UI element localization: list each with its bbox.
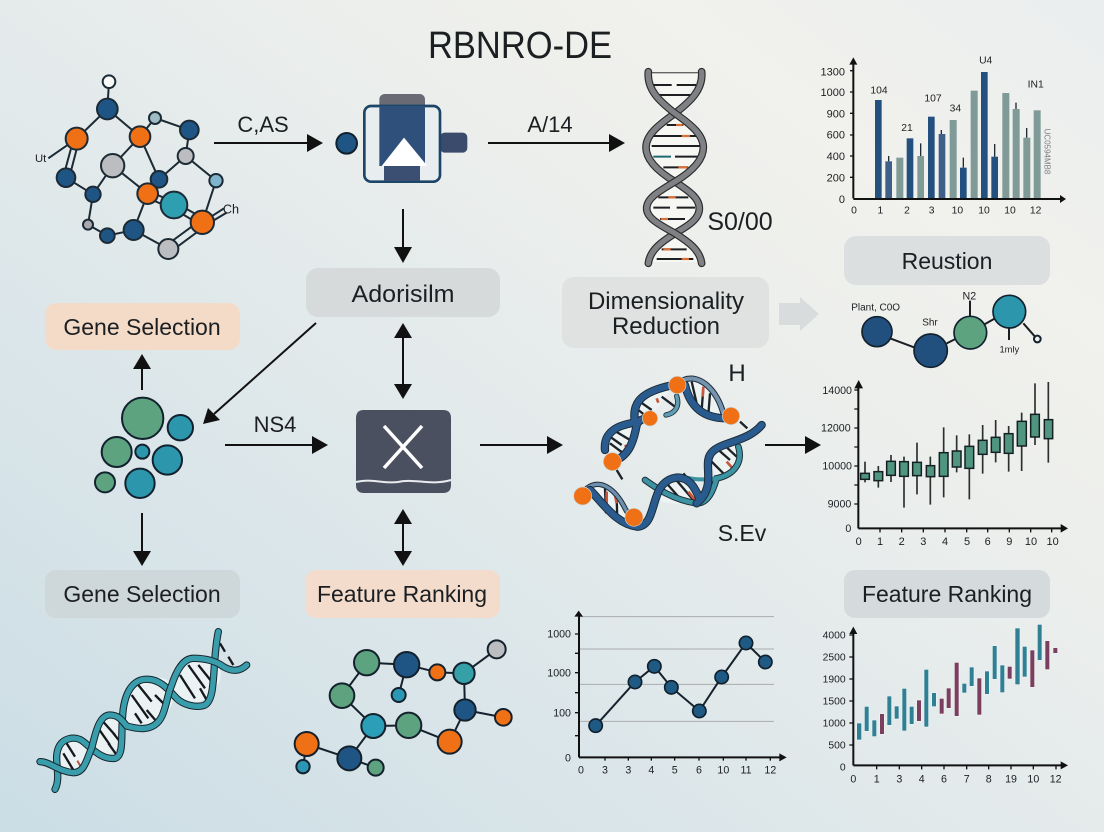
candlestick chart right: 6 (985, 536, 991, 548)
pill: Dimensionality Reduction: Dimensionality (588, 288, 744, 315)
pill: Dimensionality Reduction: Reduction (612, 313, 720, 340)
line chart (547, 611, 787, 777)
line chart: 0 (578, 765, 584, 777)
candlestick chart right: 14000 (822, 385, 852, 397)
icon: diagonal teal DNA (40, 632, 247, 789)
arrow: double X tile to Feature Ranking (394, 509, 412, 566)
pill: Gene Selection peach (45, 303, 240, 350)
candlestick chart right (821, 380, 1068, 548)
candlestick chart right: 10 (1025, 536, 1037, 548)
floating bar chart bottom right: 500 (828, 741, 846, 752)
arrow: Adorisilm to cluster (203, 323, 316, 424)
bar chart top right: 34 (950, 103, 961, 114)
bar chart top right (821, 55, 1066, 217)
line chart: 3 (625, 765, 631, 777)
icon: module block (336, 94, 467, 182)
bar chart top right: 3 (929, 206, 935, 217)
bar chart top right: 0 (851, 206, 857, 217)
pill: Reustion: Reustion (902, 248, 992, 274)
line chart: 1000 (547, 629, 571, 641)
floating bar chart bottom right: 6 (941, 774, 947, 786)
line chart: 3 (602, 765, 608, 777)
bar chart top right: 104 (870, 85, 888, 96)
line chart: 0 (565, 752, 571, 764)
bar chart top right: 0 (839, 194, 845, 206)
arrow: cluster down to Gene Selection (133, 513, 151, 566)
arrow: DNA loop to candlestick chart (765, 436, 821, 454)
arrow: molecule to module (214, 112, 323, 152)
line chart: 4 (648, 765, 654, 777)
arrow: cluster to Gene Selection (133, 354, 151, 390)
floating bar chart bottom right: 4000 (823, 631, 846, 642)
candlestick chart right: 0 (845, 523, 851, 535)
label: S0/00: S0/00 (707, 208, 773, 236)
icon: X tile (356, 410, 451, 493)
arrow: module to Adorisilm (394, 209, 412, 263)
candlestick chart right: 2 (899, 536, 905, 548)
pill: Gene Selection peach: Gene Selection (63, 314, 221, 340)
floating bar chart bottom right (823, 624, 1068, 786)
candlestick chart right: 5 (964, 536, 970, 548)
arrow: light block arrow (779, 297, 819, 331)
floating bar chart bottom right: 19 (1005, 774, 1017, 786)
line chart: 5 (672, 765, 678, 777)
bar chart top right: 200 (827, 172, 845, 184)
bar chart top right: 1000 (821, 87, 845, 99)
floating bar chart bottom right: 3 (896, 774, 902, 786)
bar chart top right: 2 (904, 206, 910, 217)
candlestick chart right: 3 (920, 536, 926, 548)
floating bar chart bottom right: 4 (919, 774, 925, 786)
bar chart top right: U4 (979, 55, 993, 66)
arrow label: A/14 (527, 112, 573, 137)
floating bar chart bottom right: 1500 (823, 697, 846, 708)
candlestick chart right: 4 (942, 536, 948, 548)
pill: Gene Selection grey (45, 570, 240, 618)
bar chart top right: 10 (978, 206, 990, 217)
arrow: module to DNA (488, 112, 625, 152)
label: Ut: Ut (35, 153, 47, 165)
bar chart top right: 10 (952, 206, 963, 217)
candlestick chart right: 9 (1006, 536, 1012, 548)
icon: small molecule right: 1mly (999, 345, 1020, 355)
bar chart top right: UC0594MB8 (1043, 129, 1052, 175)
icon: small molecule right (851, 290, 1041, 367)
label: S.Ev: S.Ev (718, 520, 767, 546)
floating bar chart bottom right: 1900 (823, 675, 846, 686)
candlestick chart right: 10 (1047, 536, 1059, 548)
floating bar chart bottom right: 1000 (823, 719, 846, 730)
line chart: 6 (696, 765, 702, 777)
candlestick chart right: 12000 (821, 422, 851, 434)
icon: small molecule right: N2 (963, 290, 976, 302)
arrow label: NS4 (254, 412, 296, 437)
bar chart top right: 12 (1030, 206, 1042, 217)
pill: Adorisilm (306, 268, 500, 317)
bar chart top right: 107 (924, 94, 942, 105)
bar chart top right: 900 (827, 108, 845, 120)
floating bar chart bottom right: 12 (1050, 774, 1062, 786)
arrow: X tile to DNA loop (480, 436, 563, 454)
floating bar chart bottom right: 0 (850, 774, 856, 786)
icon: molecule network top left (35, 75, 239, 259)
pill: Feature Ranking grey (844, 570, 1050, 618)
pill: Dimensionality Reduction (562, 277, 769, 348)
candlestick chart right: 1 (877, 536, 883, 548)
arrow: cluster to X tile (225, 412, 328, 454)
floating bar chart bottom right: 2500 (823, 653, 846, 664)
floating bar chart bottom right: 1 (874, 774, 880, 786)
label: H: H (728, 360, 746, 387)
pill: Adorisilm: Adorisilm (352, 281, 454, 308)
floating bar chart bottom right: 7 (964, 774, 970, 786)
label: Ch: Ch (223, 202, 239, 216)
line chart: 1000 (547, 667, 571, 679)
candlestick chart right: 10000 (822, 460, 852, 472)
pill: Feature Ranking peach (305, 570, 500, 618)
icon: looped DNA (574, 376, 762, 527)
bar chart top right: 1 (877, 206, 883, 217)
floating bar chart bottom right: 0 (840, 762, 846, 773)
arrow: double Adorisilm to X tile (394, 323, 412, 399)
bar chart top right: 1300 (821, 66, 845, 78)
icon: vertical DNA helix (646, 72, 703, 263)
pill: Reustion (844, 236, 1050, 285)
icon: molecule network bottom (295, 640, 512, 776)
line chart: 10 (717, 765, 729, 777)
candlestick chart right: 0 (856, 536, 862, 548)
pill: Gene Selection grey: Gene Selection (63, 581, 221, 607)
line chart: 12 (764, 765, 776, 777)
arrow label: C,AS (237, 112, 289, 137)
candlestick chart right: 9000 (828, 499, 851, 511)
pill: Feature Ranking grey: Feature Ranking (862, 581, 1032, 607)
icon: circle cluster (95, 398, 193, 498)
line chart: 11 (740, 765, 752, 777)
line chart: 100 (553, 707, 571, 719)
floating bar chart bottom right: 10 (1027, 774, 1039, 786)
floating bar chart bottom right: 8 (986, 774, 992, 786)
icon: small molecule right: Shr (922, 318, 938, 329)
bar chart top right: IN1 (1028, 80, 1044, 91)
title: RBNRO-DE (428, 25, 612, 67)
bar chart top right: 21 (901, 123, 913, 134)
icon: small molecule right: Plant, C0O (851, 302, 900, 313)
bar chart top right: 400 (827, 151, 845, 163)
bar chart top right: 10 (1004, 206, 1016, 217)
bar chart top right: 600 (827, 130, 845, 142)
pill: Feature Ranking peach: Feature Ranking (317, 581, 487, 607)
